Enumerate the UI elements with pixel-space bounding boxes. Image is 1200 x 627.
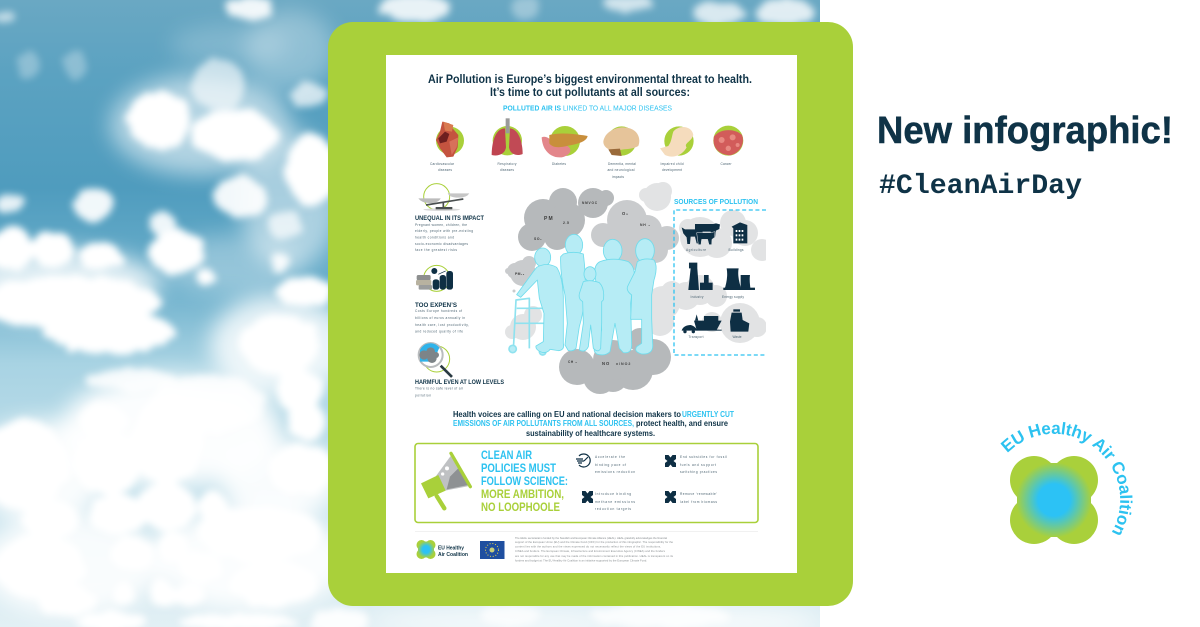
icon: heart — [436, 122, 464, 157]
small coalition logo: Air Coalition — [438, 552, 468, 558]
call to action text: protect health, and ensure — [636, 419, 728, 428]
icon: EU flag — [480, 541, 504, 559]
pollutant labels: NMVOC — [582, 201, 598, 205]
call to action text: Health voices are calling on EU and national decision makers to — [453, 410, 681, 419]
icon: magnifying glass — [419, 343, 452, 377]
panel: clean air policies — [415, 444, 758, 522]
pollutant labels: PM — [544, 216, 554, 222]
text block: harmful even at low levels: pollution — [415, 394, 431, 398]
icon: energy supply — [723, 268, 755, 290]
call to action text: URGENTLY CUT — [682, 410, 734, 419]
action: remove renewable label: Remove ‘renewable’ — [680, 492, 717, 496]
disease captions: Respiratory — [498, 162, 517, 166]
figure: man — [594, 239, 634, 355]
panel headline: FOLLOW SCIENCE: — [481, 474, 568, 488]
pollutant labels: CH ₄ — [568, 360, 577, 364]
figure: child — [579, 267, 604, 351]
icon: building — [732, 222, 747, 243]
source captions: Transport — [688, 335, 704, 339]
disclaimer text: are not responsible for any use that may be made of the information contained in this publication. HEAL is transparent on its — [515, 554, 674, 558]
source captions: Energy supply — [722, 295, 744, 299]
panel headline: POLICIES MUST — [481, 461, 556, 475]
disclaimer text: The HEAL secretariat is funded by the Swedish and European Climate Alliance (HEAL). HEAL gratefully acknowledges the financial — [515, 536, 667, 540]
source captions: Buildings — [728, 248, 744, 252]
call to action text — [453, 410, 734, 438]
icon: unequal scales — [418, 184, 469, 211]
action: end subsidies: End subsidies for fossil — [680, 455, 727, 459]
icon: megaphone — [421, 453, 470, 508]
action: end subsidies — [680, 455, 727, 474]
pollutant labels: PM₁₀ — [515, 272, 525, 276]
disease captions: impacts — [612, 175, 624, 179]
action: binding methane targets: reduction targets — [595, 507, 631, 511]
diseases subheading: POLLUTED AIR IS — [503, 104, 561, 112]
action: binding methane targets — [595, 492, 635, 511]
icon: money and rising bars — [416, 265, 453, 291]
action: accelerate: emissions reduction — [595, 470, 635, 474]
pollutant labels: NO — [602, 361, 610, 366]
disclaimer text: support of the European Union (EU) and the Climate Fund (CIFF) for the production of this infographic. The responsibility for the — [515, 540, 674, 544]
sources of pollution heading: SOURCES OF POLLUTION — [674, 197, 758, 206]
call to action text: sustainability of healthcare systems. — [526, 429, 655, 438]
text block: too expensive: health care, lost productivity, — [415, 323, 469, 327]
poster title: Air Pollution is Europe’s biggest environmental threat to health. — [428, 72, 752, 86]
text block: too expensive — [415, 302, 469, 334]
call to action text: EMISSIONS OF AIR POLLUTANTS FROM ALL SOURCES, — [453, 419, 634, 428]
action: binding methane targets: methane emissions — [595, 500, 635, 504]
icon: waste — [730, 309, 749, 332]
disease captions: Cardiovascular — [430, 162, 455, 166]
poster title: It’s time to cut pollutants at all sources: — [490, 85, 690, 99]
small coalition logo — [416, 540, 468, 559]
pollutant labels: 2.5 — [563, 221, 570, 225]
source captions — [686, 248, 744, 339]
panel headline: CLEAN AIR — [481, 448, 532, 462]
disease captions: diseases — [500, 168, 514, 172]
icon: fetus — [660, 126, 694, 157]
text block: too expensive: Costs Europe hundreds of — [415, 309, 462, 313]
text block: unequal in its impact: UNEQUAL IN ITS IMPACT — [415, 215, 484, 222]
panel headline: MORE AMBITION, — [481, 487, 564, 501]
text block: harmful even at low levels: HARMFUL EVEN AT LOW LEVELS — [415, 379, 504, 386]
sky background photo — [0, 0, 820, 627]
text block: unequal in its impact: socio-economic disadvantages — [415, 242, 468, 246]
action: end subsidies: fuels and support — [680, 463, 716, 467]
disease captions: Impaired child — [660, 162, 684, 166]
action: end subsidies: switching practices — [680, 470, 717, 474]
text block: too expensive: billions of euros annually in — [415, 316, 465, 320]
icon: cross — [582, 491, 593, 503]
pollutant labels: O₃ — [622, 211, 628, 216]
heading: new infographic: New infographic! — [877, 110, 1173, 152]
text block: harmful even at low levels: There is no safe level of air — [415, 386, 464, 390]
disclaimer text: CINEA and funders. The European Climate, Infrastructure and Environment Executive Agency (CINEA) and the funders — [515, 549, 666, 553]
disclaimer text — [515, 536, 674, 562]
action: remove renewable label — [680, 492, 717, 504]
text block: unequal in its impact: Pregnant women, children, the — [415, 223, 467, 227]
icon: cancer cell — [713, 126, 743, 156]
icon: pancreas — [542, 126, 588, 157]
text block: unequal in its impact — [415, 215, 484, 252]
disclaimer text: funders and budget at: The EU Healthy Air Coalition is an initiative supported by the European Climate Fund. — [515, 558, 647, 562]
text block: harmful even at low levels — [415, 379, 504, 398]
pollution clouds — [505, 182, 683, 394]
logo: EU Healthy Air Coalition: EU Healthy Air Coalition — [1000, 422, 1132, 535]
diseases subheading — [503, 104, 672, 112]
icon: cows — [682, 223, 720, 245]
icon: industry — [688, 263, 713, 290]
panel headline — [481, 448, 568, 514]
text block: unequal in its impact: health conditions and — [415, 236, 454, 240]
poster title — [428, 72, 752, 99]
green card — [328, 22, 853, 606]
disease captions: Dementia, mental — [608, 162, 636, 166]
icon: cross — [665, 455, 676, 467]
disease captions — [430, 162, 732, 179]
figure: elderly person — [517, 248, 564, 353]
diseases subheading: LINKED TO ALL MAJOR DISEASES — [563, 104, 672, 112]
disease captions: diseases — [438, 168, 452, 172]
illustration: family group — [509, 234, 656, 355]
disclaimer text: content lies with the authors and the views expressed do not necessarily reflect the views of the EU institutions, — [515, 544, 661, 548]
panel headline: NO LOOPHOOLE — [481, 500, 560, 514]
figure: pregnant woman — [627, 239, 656, 354]
text block: too expensive: and reduced quality of life — [415, 330, 463, 334]
pollutant labels: NH ₃ — [640, 223, 651, 227]
disease captions: Cancer — [720, 162, 732, 166]
action: accelerate — [595, 455, 635, 474]
pollutant labels: SO₂ — [534, 237, 542, 241]
small coalition logo: EU Healthy — [438, 546, 464, 552]
disease captions: and neurological — [608, 168, 635, 172]
figure: tall woman — [561, 234, 585, 351]
icon: speedometer — [576, 454, 590, 467]
icon: brain — [603, 126, 639, 156]
hashtag: #CleanAirDay — [879, 171, 1082, 202]
source captions: Industry — [690, 295, 704, 299]
disease captions: Diabetes — [552, 162, 566, 166]
pollutant labels — [515, 201, 651, 366]
action: binding methane targets: Introduce binding — [595, 492, 631, 496]
icon: lungs — [492, 118, 523, 155]
text block: unequal in its impact: face the greatest risks — [415, 248, 457, 252]
panel: sources of pollution — [672, 210, 773, 355]
source captions: Agriculture — [686, 248, 706, 252]
icon: cross — [665, 491, 676, 503]
text block: unequal in its impact: elderly, people with pre-existing — [415, 229, 473, 233]
source captions: Waste — [732, 335, 742, 339]
pollutant labels: x/NO2 — [616, 362, 631, 366]
action: accelerate: Accelerate the — [595, 455, 625, 459]
action: accelerate: binding pace of — [595, 463, 626, 467]
poster page — [386, 55, 797, 573]
text block: too expensive: TOO EXPEN’S — [415, 302, 458, 309]
action: remove renewable label: label from biomass — [680, 500, 717, 504]
disease captions: development — [662, 168, 682, 172]
disease icons row — [436, 118, 743, 157]
icon: transport — [682, 314, 722, 333]
walker frame — [509, 298, 546, 355]
